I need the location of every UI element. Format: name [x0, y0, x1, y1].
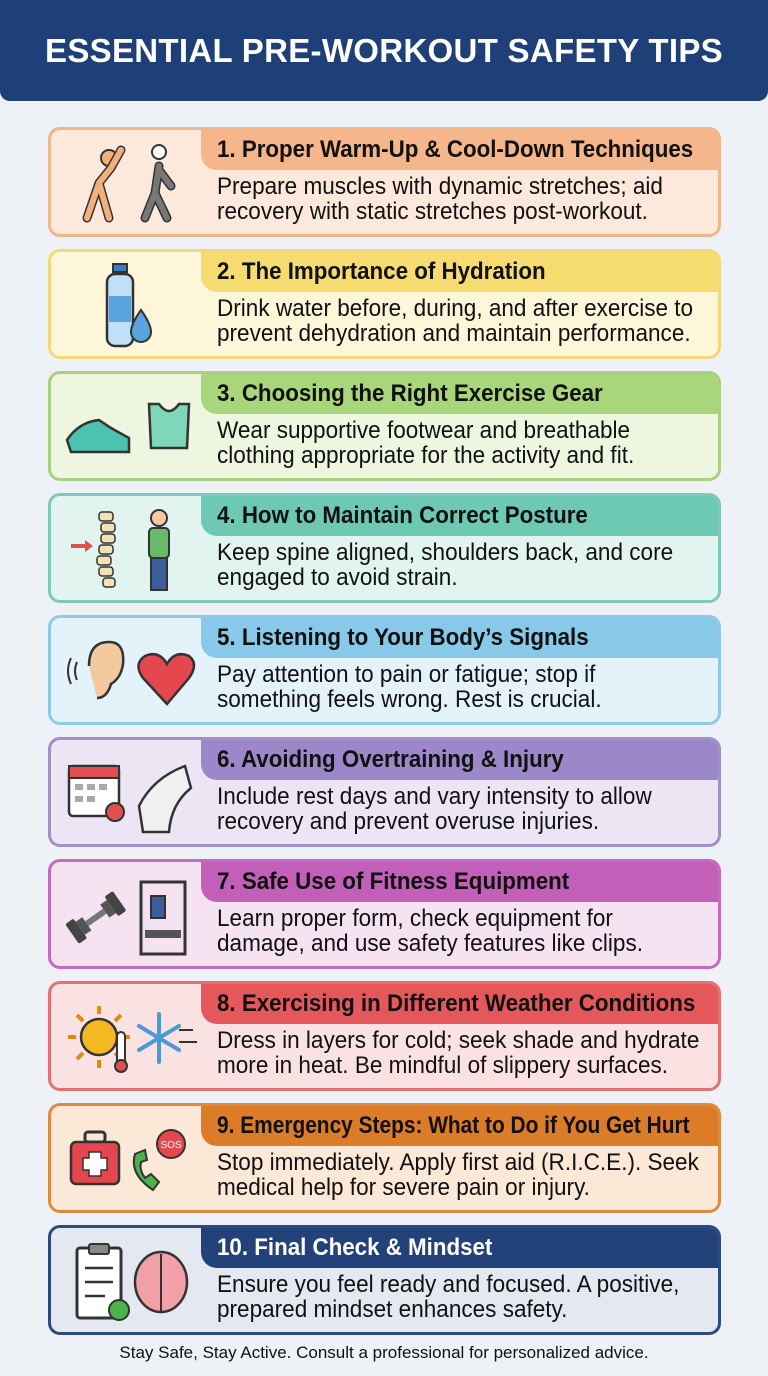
icon: clipboard and brain: [76, 1243, 188, 1321]
header: 7. Safe Use of Fitness Equipment: [217, 868, 569, 895]
panel: overtraining: [48, 737, 721, 847]
header: [201, 496, 718, 536]
text: something feels wrong. Rest is crucial.: [217, 686, 602, 713]
text: Ensure you feel ready and focused. A positive,: [217, 1271, 679, 1298]
text: prepared mindset enhances safety.: [217, 1296, 567, 1323]
text: more in heat. Be mindful of slippery surfaces.: [217, 1052, 668, 1079]
text: medical help for severe pain or injury.: [217, 1174, 590, 1201]
panel: body signals: [48, 615, 721, 725]
header: 8. Exercising in Different Weather Conditions: [217, 990, 695, 1017]
icon: ear and heart: [67, 640, 196, 706]
panel: posture: [48, 493, 721, 603]
panel: warm-up: [48, 127, 721, 237]
panel: final check: [48, 1225, 721, 1335]
header: [201, 130, 718, 170]
icon: stretching figures: [82, 144, 176, 222]
header: 3. Choosing the Right Exercise Gear: [217, 380, 603, 407]
panel: hydration: [48, 249, 721, 359]
header: [201, 1228, 718, 1268]
text: [217, 173, 663, 225]
icon: spine and figure: [71, 509, 170, 591]
header: 2. The Importance of Hydration: [217, 258, 546, 285]
footer note: Stay Safe, Stay Active. Consult a professional for personalized advice.: [119, 1343, 649, 1362]
text: Stop immediately. Apply first aid (R.I.C.E.). Seek: [217, 1149, 699, 1176]
icon: sun and snowflake: [68, 1006, 197, 1073]
text: [217, 1271, 679, 1323]
text: prevent dehydration and maintain performance.: [217, 320, 691, 347]
header: 9. Emergency Steps: What to Do if You Get Hurt: [217, 1112, 690, 1139]
panel: gear: [48, 371, 721, 481]
text: clothing appropriate for the activity and fit.: [217, 442, 634, 469]
header: [201, 862, 718, 902]
icon: first aid kit and phone: SOS: [160, 1140, 182, 1151]
text: Learn proper form, check equipment for: [217, 905, 613, 932]
text: [217, 783, 652, 835]
icon: shoe and top: [66, 402, 190, 454]
text: [217, 417, 634, 469]
text: [217, 661, 602, 713]
header: 4. How to Maintain Correct Posture: [217, 502, 588, 529]
panel: weather: [48, 981, 721, 1091]
header: 10. Final Check & Mindset: [217, 1234, 492, 1261]
icon: calendar and bandage: [68, 764, 192, 834]
header: [201, 1106, 718, 1146]
text: Dress in layers for cold; seek shade and hydrate: [217, 1027, 699, 1054]
text: [217, 905, 643, 957]
text: engaged to avoid strain.: [217, 564, 458, 591]
text: Keep spine aligned, shoulders back, and core: [217, 539, 673, 566]
header: 1. Proper Warm-Up & Cool-Down Techniques: [217, 136, 693, 163]
text: [217, 1027, 699, 1079]
header: [201, 740, 718, 780]
header: [201, 984, 718, 1024]
panel: equipment: [48, 859, 721, 969]
text: [217, 539, 673, 591]
header: [201, 252, 718, 292]
panel: emergency: [48, 1103, 721, 1213]
text: recovery and prevent overuse injuries.: [217, 808, 599, 835]
text: Include rest days and vary intensity to allow: [217, 783, 652, 810]
header: [201, 618, 718, 658]
icon: water bottle: [106, 263, 152, 348]
title: ESSENTIAL PRE-WORKOUT SAFETY TIPS: [45, 32, 723, 69]
text: recovery with static stretches post-workout.: [217, 198, 648, 225]
text: [217, 1149, 699, 1201]
text: Drink water before, during, and after exercise to: [217, 295, 693, 322]
text: Wear supportive footwear and breathable: [217, 417, 630, 444]
title: [0, 0, 768, 101]
header: [201, 374, 718, 414]
header: 6. Avoiding Overtraining & Injury: [217, 746, 564, 773]
icon: dumbbell and machine: [66, 880, 186, 956]
text: Prepare muscles with dynamic stretches; aid: [217, 173, 663, 200]
text: damage, and use safety features like clips.: [217, 930, 643, 957]
text: [217, 295, 693, 347]
text: Pay attention to pain or fatigue; stop if: [217, 661, 595, 688]
icon: first aid kit and phone: [70, 1129, 186, 1192]
header: 5. Listening to Your Body’s Signals: [217, 624, 589, 651]
